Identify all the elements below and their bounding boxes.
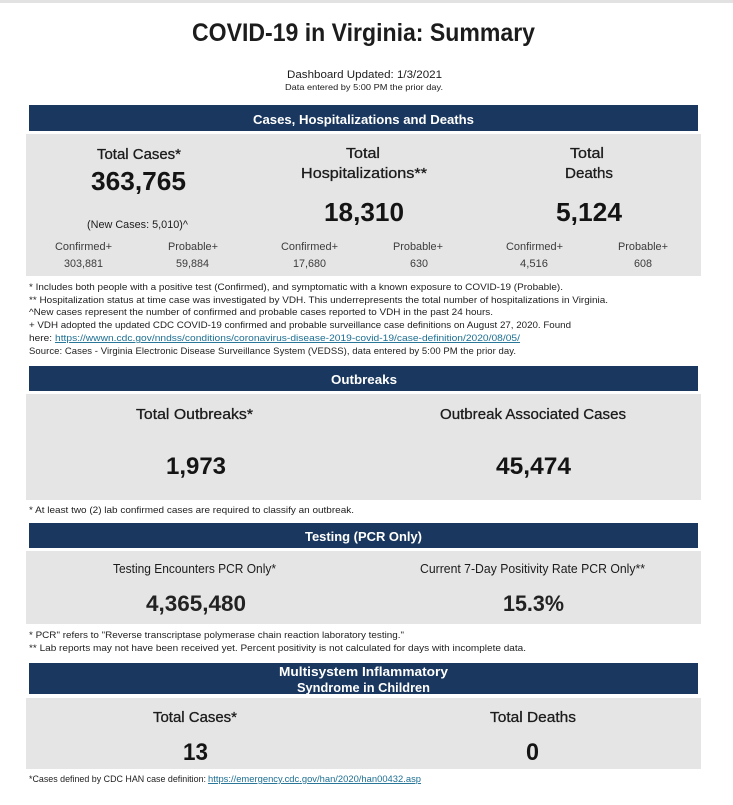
positivity rate stat	[420, 562, 645, 616]
title: COVID-19 in Virginia: Summary	[192, 19, 535, 47]
total deaths stat	[556, 145, 623, 227]
MIS-C total cases stat: 13	[183, 739, 208, 766]
total cases breakdown	[55, 241, 218, 270]
hospitalizations breakdown: Confirmed+	[281, 241, 338, 253]
panel: multisystem inflammatory syndrome	[26, 698, 701, 769]
total cases breakdown: Probable+	[168, 241, 218, 253]
deaths breakdown: 608	[634, 258, 652, 270]
panel: testing	[26, 551, 701, 624]
footnotes: cases section: Source: Cases - Virginia Electronic Disease Surveillance System (VEDSS), data entered by 5:00 PM the prior day.	[29, 346, 516, 357]
outbreak associated cases stat	[440, 406, 626, 480]
dashboard updated date: Data entered by 5:00 PM the prior day.	[285, 82, 443, 92]
deaths breakdown: Probable+	[618, 241, 668, 253]
total cases stat: Total Cases*	[97, 146, 181, 163]
section header: cases, hospitalizations and deaths: Cases, Hospitalizations and Deaths	[253, 112, 474, 127]
footnotes: cases section: https://wwwn.cdc.gov/nndss/conditions/coronavirus-disease-2019-covid-19/case-definition/2020/08/05/	[55, 333, 520, 344]
deaths breakdown: 4,516	[520, 258, 548, 270]
total deaths stat: 5,124	[556, 197, 623, 227]
section header: multisystem inflammatory syndrome: Multisystem Inflammatory	[279, 664, 449, 679]
total cases stat: (New Cases: 5,010)^	[87, 219, 189, 231]
total hospitalizations stat: Hospitalizations**	[301, 165, 427, 182]
footnotes: cases section: here:	[29, 333, 52, 344]
outbreak associated cases stat: Outbreak Associated Cases	[440, 406, 626, 423]
section header: multisystem inflammatory syndrome: Syndrome in Children	[297, 680, 430, 695]
footnotes: testing	[29, 630, 526, 654]
total deaths stat: Total	[570, 145, 604, 162]
section header: outbreaks	[29, 366, 698, 391]
total hospitalizations stat: Total	[346, 145, 380, 162]
deaths breakdown: Confirmed+	[506, 241, 563, 253]
footnotes: cases section: ** Hospitalization status at time case was investigated by VDH. This underrepresents the total number of hospitalizations in Virginia.	[29, 295, 608, 306]
section header: testing	[29, 523, 698, 548]
MIS-C total deaths stat	[490, 709, 576, 766]
hospitalizations breakdown	[281, 241, 443, 270]
total hospitalizations stat: 18,310	[324, 197, 404, 227]
total deaths stat: Deaths	[565, 165, 613, 182]
section header: cases, hospitalizations and deaths	[29, 105, 698, 131]
MIS-C total deaths stat: Total Deaths	[490, 709, 576, 726]
total outbreaks stat	[136, 406, 253, 480]
total cases breakdown: Confirmed+	[55, 241, 112, 253]
section header: multisystem inflammatory syndrome	[29, 663, 698, 695]
footnote: MIS-C	[29, 774, 421, 785]
total cases breakdown: 303,881	[64, 258, 103, 270]
footnotes: testing: * PCR" refers to "Reverse transcriptase polymerase chain reaction laboratory testing."	[29, 630, 404, 641]
hospitalizations breakdown: Probable+	[393, 241, 443, 253]
MIS-C total cases stat: Total Cases*	[153, 709, 237, 726]
footnote: MIS-C: *Cases defined by CDC HAN case definition:	[29, 774, 206, 785]
total cases breakdown: 59,884	[176, 258, 209, 270]
footnotes: cases section: + VDH adopted the updated CDC COVID-19 confirmed and probable surveillance case definitions on August 27, 2020. Found	[29, 320, 571, 331]
positivity rate stat: 15.3%	[503, 591, 564, 616]
hospitalizations breakdown: 17,680	[293, 258, 326, 270]
footnotes: cases section: * Includes both people with a positive test (Confirmed), and symptomatic with a known exposure to COVID-19 (Probable).	[29, 282, 563, 293]
section header: testing: Testing (PCR Only)	[305, 529, 422, 544]
footnotes: testing: ** Lab reports may not have been received yet. Percent positivity is not calculated for days with incomplete data.	[29, 643, 526, 654]
dashboard updated date: Dashboard Updated: 1/3/2021	[287, 69, 442, 81]
testing encounters stat	[113, 562, 276, 616]
total cases stat	[87, 146, 189, 231]
outbreak associated cases stat: 45,474	[496, 453, 572, 480]
total hospitalizations stat	[301, 145, 427, 227]
hospitalizations breakdown: 630	[410, 258, 428, 270]
footnote: MIS-C: https://emergency.cdc.gov/han/2020/han00432.asp	[208, 774, 421, 785]
testing encounters stat: Testing Encounters PCR Only*	[113, 562, 276, 576]
deaths breakdown	[506, 241, 668, 270]
positivity rate stat: Current 7-Day Positivity Rate PCR Only**	[420, 562, 645, 576]
panel: cases, hospitalizations and deaths	[26, 134, 701, 276]
dashboard updated date	[285, 69, 443, 92]
section header: outbreaks: Outbreaks	[331, 372, 397, 387]
MIS-C total deaths stat: 0	[526, 739, 539, 766]
panel: outbreaks	[26, 394, 701, 500]
footnotes: cases section: ^New cases represent the number of confirmed and probable cases reported to VDH in the past 24 hours.	[29, 307, 493, 318]
testing encounters stat: 4,365,480	[146, 591, 246, 616]
footnote: outbreaks: * At least two (2) lab confirmed cases are required to classify an outbreak.	[29, 505, 354, 516]
total cases stat: 363,765	[91, 166, 186, 196]
total outbreaks stat: 1,973	[166, 453, 226, 480]
footnotes: cases section	[29, 282, 608, 357]
MIS-C total cases stat	[153, 709, 237, 766]
total outbreaks stat: Total Outbreaks*	[136, 406, 253, 423]
